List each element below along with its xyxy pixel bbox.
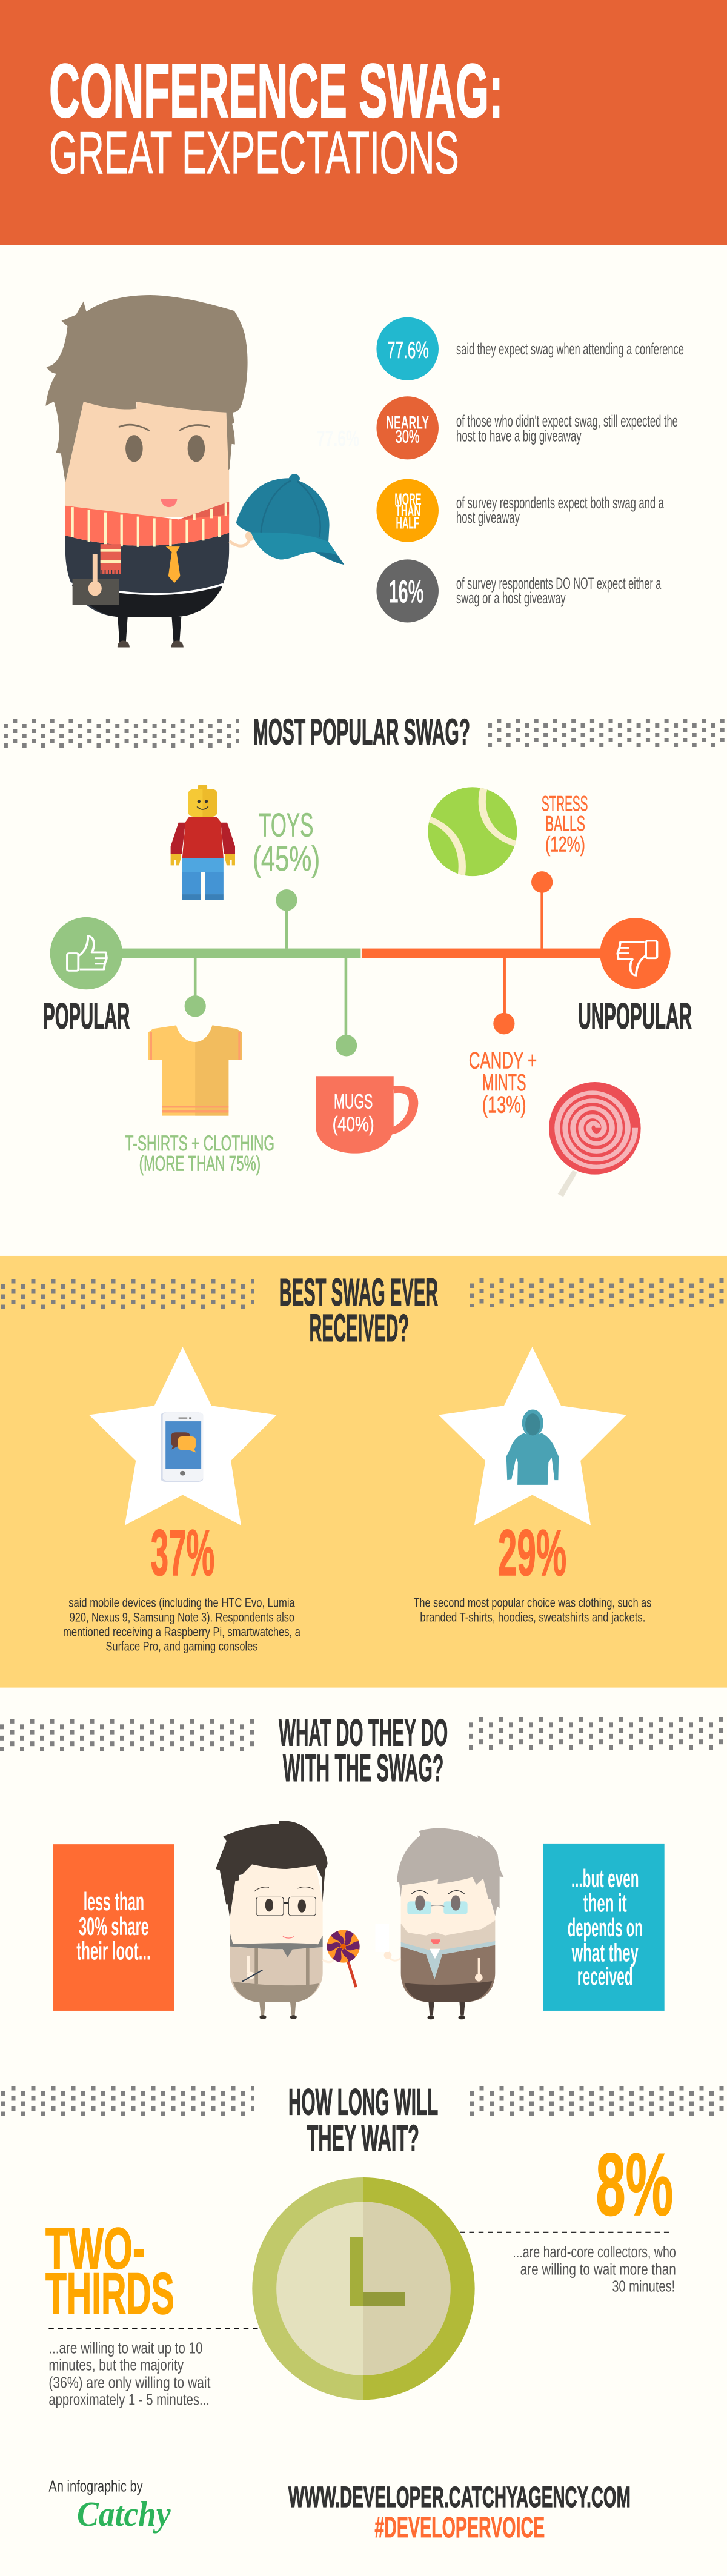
section: how long will they wait	[45, 2082, 676, 2543]
label: candy + mints: (13%)	[482, 1092, 526, 1118]
text block: left: (36%) are only willing to wait	[48, 2374, 211, 2391]
stat: nearly 30%: NEARLY	[386, 413, 429, 433]
label: toys: (45%)	[253, 840, 320, 878]
label: toys: TOYS	[259, 807, 313, 844]
label: stress balls: (12%)	[545, 832, 585, 856]
section: best swag ever received: RECEIVED?	[309, 1307, 409, 1350]
icon: lego toy	[171, 785, 235, 900]
icon: thumbs down	[600, 918, 671, 989]
stat: nearly 30%: 30%	[396, 427, 420, 446]
ghost text: 77.6%	[317, 426, 359, 451]
stat: nearly 30%	[376, 396, 678, 459]
stat: more than half: HALF	[396, 514, 419, 533]
text block: mobile devices: Surface Pro, and gaming consoles	[105, 1639, 258, 1653]
stat: more than half: THAN	[396, 502, 420, 520]
character: dark-haired man with lollipop	[216, 1821, 364, 2019]
label: t-shirts: (MORE THAN 75%)	[139, 1151, 261, 1175]
section: how long will they wait: HOW LONG WILL	[288, 2082, 438, 2123]
label: stress balls	[542, 791, 588, 856]
text block: left: approximately 1 - 5 minutes...	[48, 2391, 210, 2408]
icon: swirl lollipop	[327, 1930, 360, 1988]
icon: thumbs up	[50, 917, 122, 989]
text block: right	[513, 2243, 676, 2295]
stat: 77.6%	[376, 317, 684, 380]
icon: mug	[316, 1076, 414, 1154]
stat: two-thirds: TWO-	[45, 2217, 145, 2282]
text block: left: ...are willing to wait up to 10	[48, 2339, 202, 2357]
stat: 16%: swag or a host giveaway	[456, 589, 566, 607]
heading	[279, 1271, 438, 1350]
icon: clock	[252, 2177, 475, 2400]
stat: more than half	[376, 479, 664, 542]
stat: 16%: 16%	[388, 574, 423, 609]
stat: two-thirds	[45, 2217, 174, 2326]
callout: depends: then it	[583, 1890, 627, 1917]
stat: 77.6%: 77.6%	[387, 337, 429, 363]
icon: hoodie	[506, 1409, 559, 1485]
section: most popular swag: POPULAR	[43, 997, 130, 1037]
section: most popular swag	[43, 712, 692, 1197]
text block: right: 30 minutes!	[612, 2277, 675, 2295]
section: what do they do with the swag: their loot...	[76, 1937, 151, 1965]
footer: credit: Catchy	[77, 2494, 171, 2534]
dashed line: right	[460, 2231, 672, 2234]
section: best swag ever received: 29%	[498, 1516, 566, 1589]
heading	[279, 1711, 448, 1790]
icon: mug: (40%)	[333, 1112, 374, 1136]
label: candy + mints: MINTS	[482, 1069, 526, 1095]
text block: left: minutes, but the majority	[48, 2356, 184, 2374]
footer: credit: An infographic by	[48, 2477, 143, 2495]
stat: 16%	[376, 559, 661, 622]
stat: more than half: host giveaway	[456, 509, 520, 526]
stats panel	[317, 317, 684, 622]
character: man with cap	[45, 295, 344, 648]
section: most popular swag: STRESS	[542, 791, 588, 815]
text block: clothing	[414, 1596, 651, 1624]
star: clothing	[439, 1347, 626, 1525]
section: what do they do with the swag: 30% share	[79, 1913, 149, 1940]
section: best swag ever received: 920, Nexus 9, Samsung Note 3). Respondents also	[70, 1610, 294, 1624]
label: candy + mints	[469, 1047, 537, 1118]
section: most popular swag: T-SHIRTS + CLOTHING	[125, 1131, 274, 1155]
text block: mobile devices	[63, 1596, 300, 1653]
stat: nearly 30%: host to have a big giveaway	[456, 427, 582, 445]
header banner	[0, 0, 727, 245]
section: how long will they wait: THEY WAIT?	[307, 2117, 419, 2159]
character: grey-haired man	[375, 1828, 504, 2019]
icon: cap	[236, 474, 344, 565]
star: mobile devices	[89, 1347, 277, 1525]
label: toys	[253, 807, 320, 878]
text block: left	[48, 2339, 211, 2408]
footer: credit	[48, 2477, 171, 2534]
icon: stress ball	[427, 787, 519, 877]
section: how long will they wait: THIRDS	[45, 2262, 174, 2326]
section: what do they do with the swag	[53, 1711, 665, 2011]
icon: phone	[161, 1412, 203, 1482]
section: best swag ever received: 37%	[151, 1516, 214, 1589]
subtitle: GREAT EXPECTATIONS	[49, 120, 459, 187]
icon: mug: MUGS	[334, 1089, 373, 1113]
section: best swag ever received: mentioned receiving a Raspberry Pi, smartwatches, a	[63, 1625, 300, 1639]
label: t-shirts	[125, 1131, 274, 1175]
section: best swag ever received	[0, 1256, 727, 1688]
text block: mobile devices: said mobile devices (including the HTC Evo, Lumia	[68, 1596, 295, 1610]
heading	[288, 2082, 438, 2159]
stat: more than half: MORE	[394, 491, 422, 508]
icon: lollipop	[549, 1082, 641, 1197]
callout: depends	[543, 1844, 665, 2011]
timeline	[122, 871, 601, 1057]
section: most popular swag: BALLS	[545, 811, 585, 835]
label: candy + mints: CANDY +	[469, 1047, 537, 1074]
section: what do they do with the swag: less than	[84, 1888, 144, 1916]
icon: t-shirt	[148, 1025, 242, 1116]
dashed line: left	[48, 2328, 260, 2330]
callout: share their loot	[53, 1844, 174, 2011]
